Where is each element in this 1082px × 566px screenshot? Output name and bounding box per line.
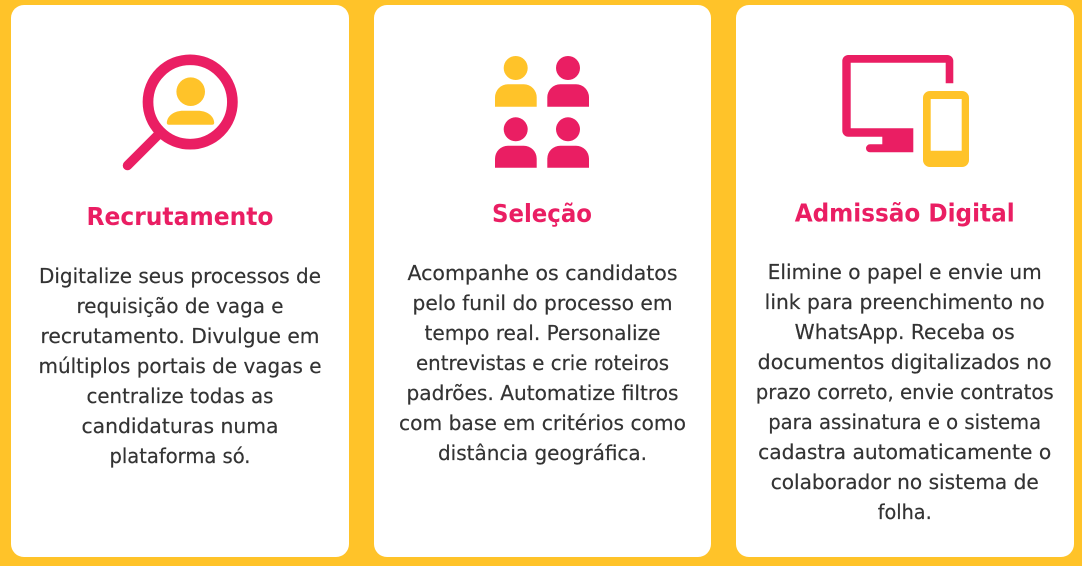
body text: Seleção <box>399 261 686 465</box>
body text: Admissão Digital: documentos digitalizados no <box>758 350 1052 374</box>
card background <box>11 5 349 557</box>
icon: four people <box>495 56 589 168</box>
body text: Admissão Digital: WhatsApp. Receba os <box>795 320 1015 344</box>
body text: Seleção: padrões. Automatize filtros <box>406 381 678 405</box>
card background <box>736 5 1074 557</box>
body text: Admissão Digital: cadastra automaticamente o <box>758 440 1051 464</box>
body text: Seleção: entrevistas e crie roteiros <box>416 351 669 375</box>
body text: Seleção: com base em critérios como <box>399 411 686 435</box>
body text: Recrutamento: requisição de vaga e <box>76 294 284 318</box>
body text: Admissão Digital: link para preenchimento no <box>765 290 1045 314</box>
body text: Admissão Digital: colaborador no sistema de <box>771 470 1039 494</box>
body text: Recrutamento: centralize todas as <box>86 384 274 408</box>
body text: Seleção: Acompanhe os candidatos <box>408 261 678 285</box>
body text: Recrutamento: plataforma só. <box>110 444 250 468</box>
body text: Admissão Digital <box>756 260 1054 524</box>
body text: Recrutamento: candidaturas numa <box>82 414 278 438</box>
panel: Recrutamento <box>11 5 349 557</box>
body text: Admissão Digital: para assinatura e o sistema <box>768 410 1041 434</box>
heading: Recrutamento: Recrutamento <box>86 202 274 231</box>
body text: Seleção: tempo real. Personalize <box>424 321 660 345</box>
body text: Seleção: distância geográfica. <box>438 441 647 465</box>
body text: Admissão Digital: prazo correto, envie contratos <box>756 380 1054 404</box>
panel: Seleção <box>374 5 711 557</box>
icon: magnifying glass over person <box>128 60 232 165</box>
body text: Admissão Digital: Elimine o papel e envie um <box>768 260 1042 284</box>
heading: Seleção: Seleção <box>492 199 592 228</box>
body text: Recrutamento <box>38 264 322 468</box>
card background <box>374 5 711 557</box>
heading: Admissão Digital: Admissão Digital <box>795 198 1015 228</box>
body text: Recrutamento: recrutamento. Divulgue em <box>40 324 320 348</box>
body text: Recrutamento: Digitalize seus processos de <box>39 264 321 288</box>
body text: Admissão Digital: folha. <box>878 500 932 524</box>
icon: monitor and smartphone <box>842 55 969 167</box>
panel: Admissão Digital <box>736 5 1074 557</box>
body text: Recrutamento: múltiplos portais de vagas e <box>38 354 322 378</box>
body text: Seleção: pelo funil do processo em <box>412 291 672 315</box>
